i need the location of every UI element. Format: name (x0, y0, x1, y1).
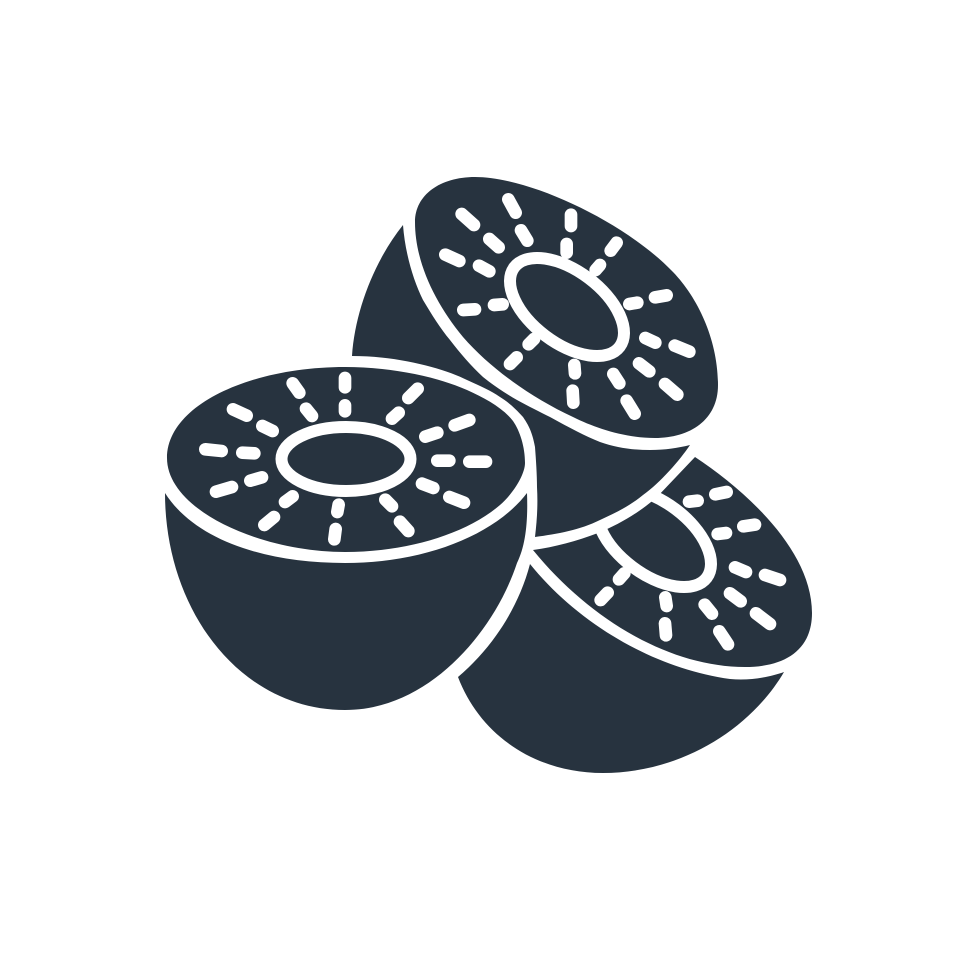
kiwi front: skin body (165, 493, 527, 710)
kiwi right: seeds (601, 492, 780, 644)
kiwi back: core ring (493, 239, 641, 375)
kiwi front: seeds (205, 378, 486, 539)
kiwi back: skin body (352, 225, 690, 537)
kiwi back: cut face (415, 177, 718, 438)
kiwi right: core ring (580, 470, 728, 606)
kiwi right: skin body (458, 564, 784, 773)
kiwi front: cut face (167, 367, 525, 552)
kiwi right: cut face (533, 457, 812, 667)
kiwi front: core ring (282, 427, 410, 491)
kiwi half: front left (165, 367, 527, 710)
kiwi half: lower right (458, 457, 812, 773)
kiwi back: seeds (445, 199, 689, 414)
kiwi half: back top (352, 177, 718, 537)
